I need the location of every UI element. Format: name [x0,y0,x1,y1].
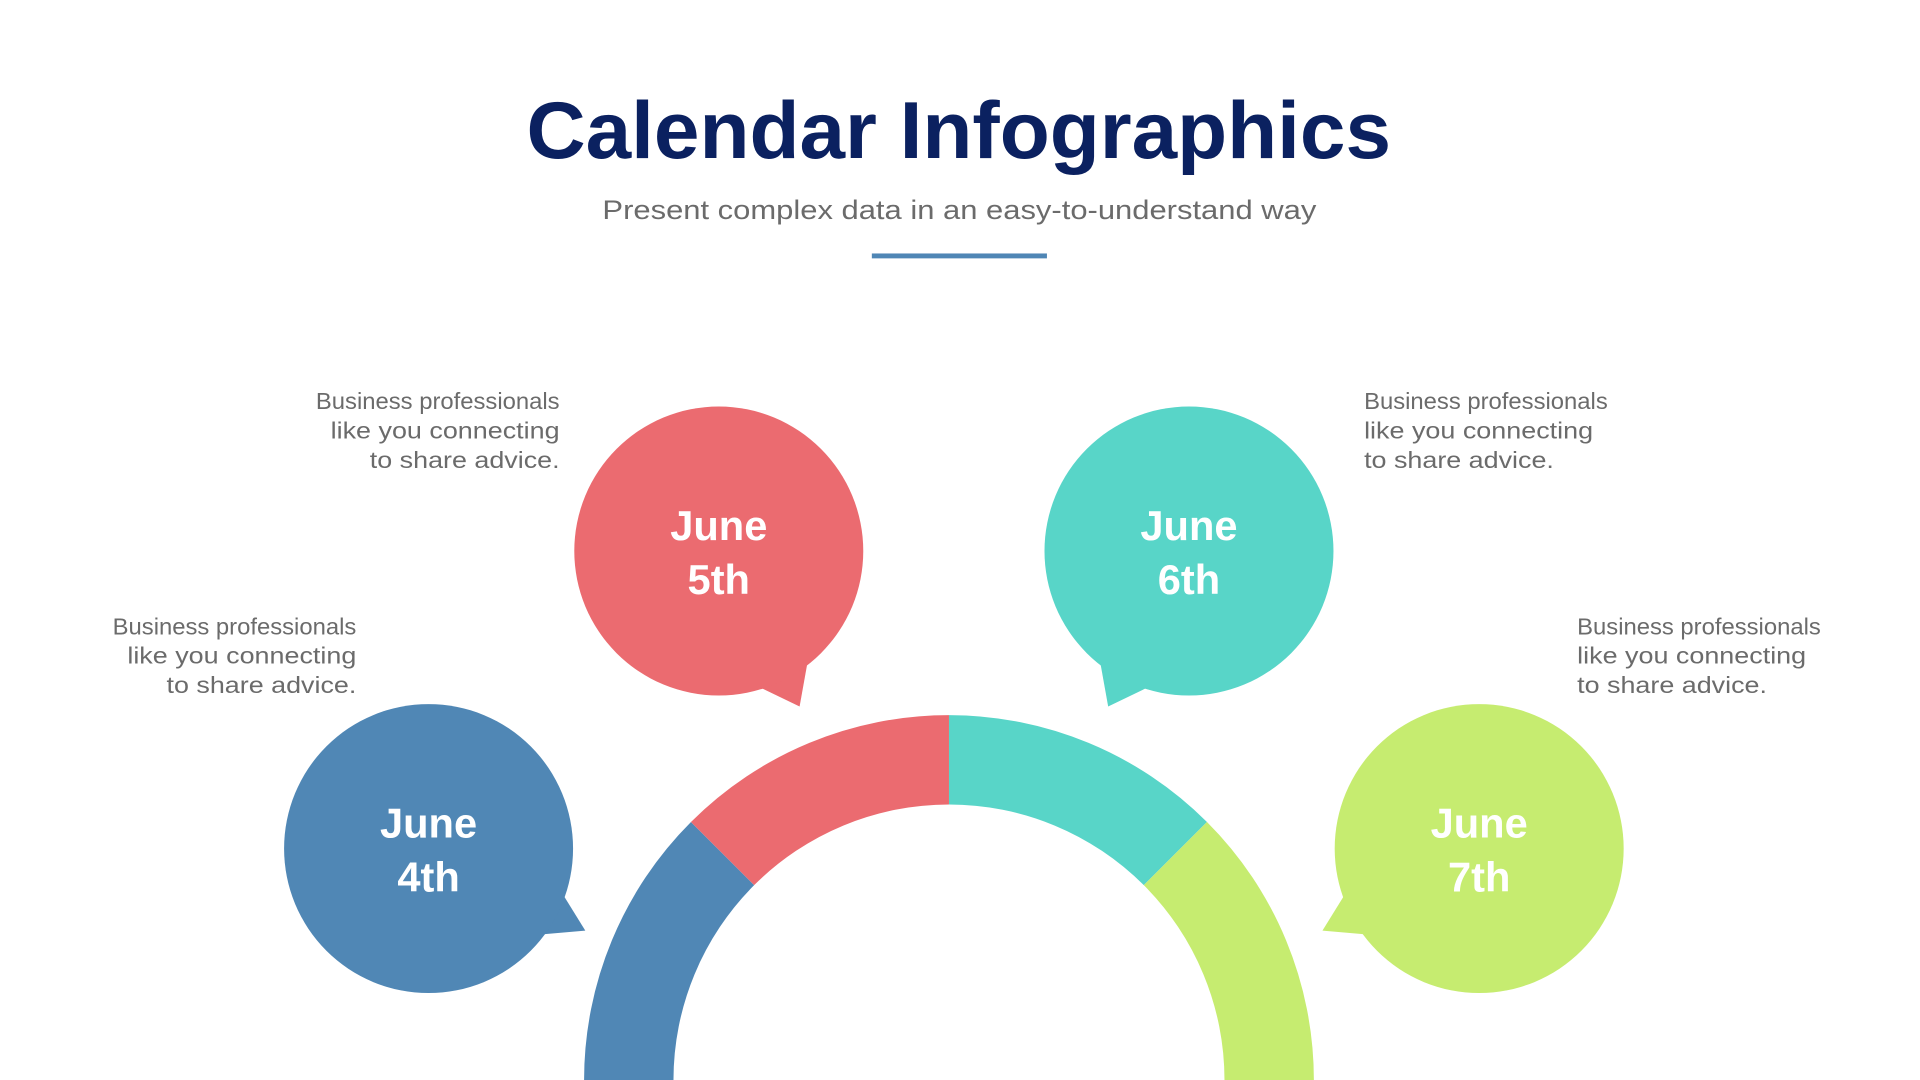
subtitle: Present complex data in an easy-to-understand way [602,195,1317,225]
text: June 6th description: like you connecting [1364,417,1593,443]
text: June 4th description: Business professionals [113,613,356,639]
bubble: June 7th: 7th [1448,853,1510,900]
text: June 7th description: like you connecting [1577,643,1806,669]
bubble: June 5th: June [670,502,767,549]
bubble: June 4th: 4th [397,853,460,900]
bubble: June 6th [1044,407,1333,707]
bubble: June 6th: 6th [1158,556,1220,603]
bubble: June 5th [574,407,863,707]
bubble: June 7th [1322,704,1624,993]
bubble: June 4th [284,704,585,993]
text: June 6th description: to share advice. [1364,447,1554,473]
bubble: June 7th: June [1431,800,1528,847]
title: Calendar Infographics [527,86,1391,176]
half ring chart [584,715,1314,1080]
text: June 6th description: Business professionals [1364,388,1608,414]
text: June 5th description: like you connecting [331,417,560,443]
text: June 6th description [1364,388,1608,473]
text: June 7th description: Business professionals [1577,613,1821,639]
text: June 4th description: like you connecting [127,643,356,669]
text: June 5th description: to share advice. [370,447,560,473]
text: June 7th description: to share advice. [1577,672,1767,698]
text: June 7th description [1577,613,1821,698]
bubble: June 4th: June [380,800,477,847]
bubble: June 6th: June [1140,502,1238,549]
text: June 4th description [113,613,356,698]
text: June 5th description [316,388,560,473]
text: June 5th description: Business professionals [316,388,560,414]
text: June 4th description: to share advice. [167,672,356,698]
bubble: June 5th: 5th [688,556,750,603]
